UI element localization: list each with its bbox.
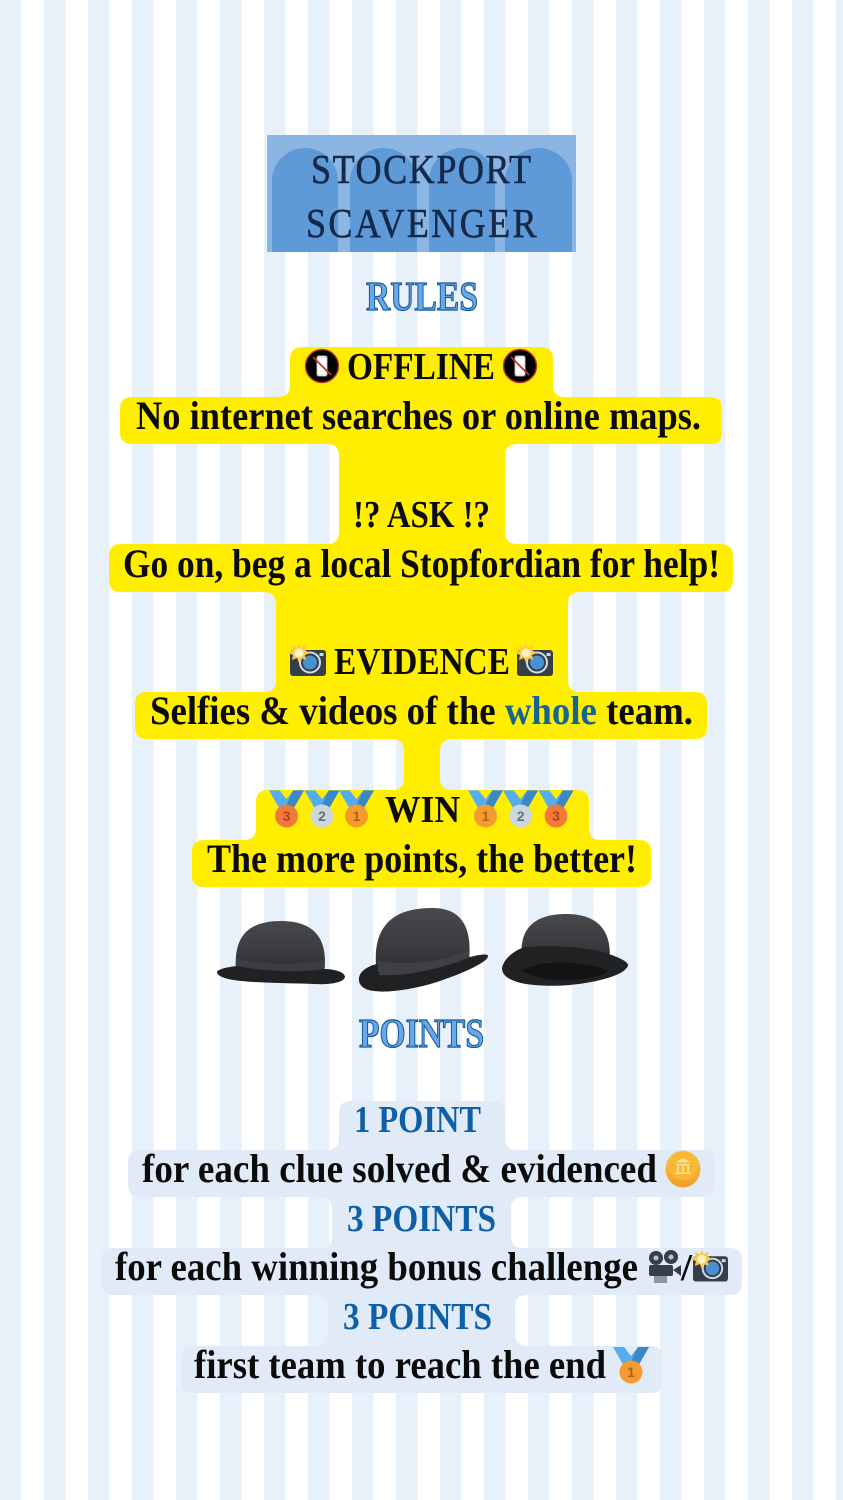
medals right: 1 <box>482 808 490 824</box>
medals left <box>269 790 374 828</box>
heading: rules: RULES <box>366 273 478 319</box>
icon: camera left <box>288 643 326 676</box>
3 points label: 3 POINTS <box>347 1198 496 1240</box>
title text: STOCKPORT <box>311 148 531 193</box>
medals left: 1 <box>353 808 361 824</box>
icon: camera right <box>515 643 553 676</box>
medals left: 2 <box>318 808 326 824</box>
offline rule: No internet searches or online maps. <box>136 393 701 438</box>
medals right: 3 <box>552 808 560 824</box>
icon: bowler hat 3 <box>502 914 628 986</box>
win heading: WIN <box>385 789 460 831</box>
ask heading: !? ASK !? <box>353 494 490 536</box>
icon: no phone right <box>504 350 536 382</box>
slash: / <box>680 1247 692 1289</box>
icon: medal <box>613 1347 649 1384</box>
arches <box>272 148 572 252</box>
medals left: 3 <box>283 808 291 824</box>
medals right: 2 <box>517 808 525 824</box>
icon: coin <box>666 1150 700 1188</box>
3 points label: 3 POINTS <box>343 1296 492 1338</box>
offline heading: OFFLINE <box>347 346 495 388</box>
ask rule: Go on, beg a local Stopfordian for help! <box>123 541 720 586</box>
icon: no phone left <box>306 350 338 382</box>
bonus challenge description: for each winning bonus challenge <box>115 1244 638 1289</box>
title text <box>306 148 537 247</box>
pale blue panel shape <box>101 1101 742 1393</box>
title text: SCAVENGER <box>306 202 537 247</box>
panel: points <box>101 1099 742 1393</box>
icon: film projector <box>649 1250 681 1283</box>
icon: bowler hat 2 <box>359 908 488 992</box>
icon: camera <box>691 1249 728 1282</box>
panel: rules <box>109 346 733 887</box>
1 point label: 1 POINT <box>354 1099 481 1141</box>
evidence rule: Selfies & videos of the whole team. <box>150 688 693 733</box>
medals right <box>468 790 574 828</box>
first team description: first team to reach the end <box>194 1342 606 1387</box>
heading: points: POINTS <box>359 1010 484 1056</box>
evidence heading: EVIDENCE <box>334 641 510 683</box>
icon: medal: 1 <box>627 1364 635 1380</box>
yellow panel shape <box>109 347 733 887</box>
title banner <box>267 135 576 252</box>
1 point description: for each clue solved & evidenced <box>142 1146 657 1191</box>
bowler hats <box>217 908 628 992</box>
win rule: The more points, the better! <box>207 836 637 881</box>
icon: bowler hat 1 <box>217 921 345 984</box>
